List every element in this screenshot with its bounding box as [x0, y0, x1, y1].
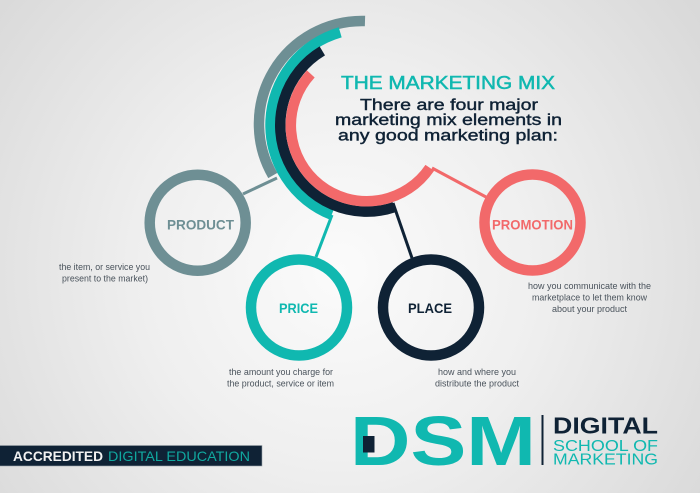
description: promotion: about your product — [552, 304, 627, 315]
logo: DSM Digital School of Marketing: DIGITAL — [553, 412, 658, 438]
connector: product — [243, 178, 277, 194]
circle: place — [383, 260, 479, 356]
circle: product: PRODUCT — [167, 216, 234, 232]
description: price: the amount you charge for — [229, 367, 333, 378]
logo: DSM Digital School of Marketing: SCHOOL OF — [553, 438, 658, 455]
logo: DSM Digital School of Marketing — [350, 402, 658, 480]
circle: place: PLACE — [408, 300, 452, 316]
description: place: how and where you — [438, 367, 516, 378]
description: promotion: how you communicate with the — [528, 281, 651, 292]
arc: product (grey) — [259, 21, 365, 176]
connector: promotion — [432, 168, 486, 197]
connector: price — [316, 215, 332, 257]
circle: promotion: PROMOTION — [492, 216, 573, 232]
subtitle: There are four major — [360, 97, 538, 114]
logo: DSM Digital School of Marketing: DSM — [350, 402, 536, 480]
arc: place (navy) — [280, 51, 394, 212]
circle: product — [150, 175, 246, 271]
accreditation banner: DIGITAL EDUCATION — [108, 448, 250, 464]
title: THE MARKETING MIX — [341, 72, 555, 93]
subtitle: marketing mix elements in — [335, 112, 562, 129]
description: place: distribute the product — [435, 378, 519, 390]
description: product: present to the market) — [62, 274, 148, 284]
circle: price — [251, 260, 347, 356]
logo: DSM Digital School of Marketing: MARKETING — [553, 452, 658, 468]
circle: price: PRICE — [279, 300, 318, 316]
arc: promotion (coral) — [291, 74, 430, 201]
description: promotion: marketplace to let them know — [532, 292, 647, 304]
description: promotion — [528, 281, 651, 315]
subtitle — [335, 97, 562, 144]
circle: promotion — [484, 174, 580, 270]
subtitle: any good marketing plan: — [338, 128, 558, 144]
connector: place — [393, 203, 412, 258]
accreditation banner: ACCREDITED — [13, 448, 103, 464]
arc: price (teal) — [271, 32, 340, 215]
nested arcs diagram — [259, 21, 430, 215]
description: price — [227, 367, 334, 390]
description: product: the item, or service you — [59, 262, 150, 273]
accreditation banner — [0, 446, 262, 466]
description: place — [435, 367, 519, 390]
description: price: the product, service or item — [227, 378, 334, 390]
description: product — [59, 262, 150, 284]
